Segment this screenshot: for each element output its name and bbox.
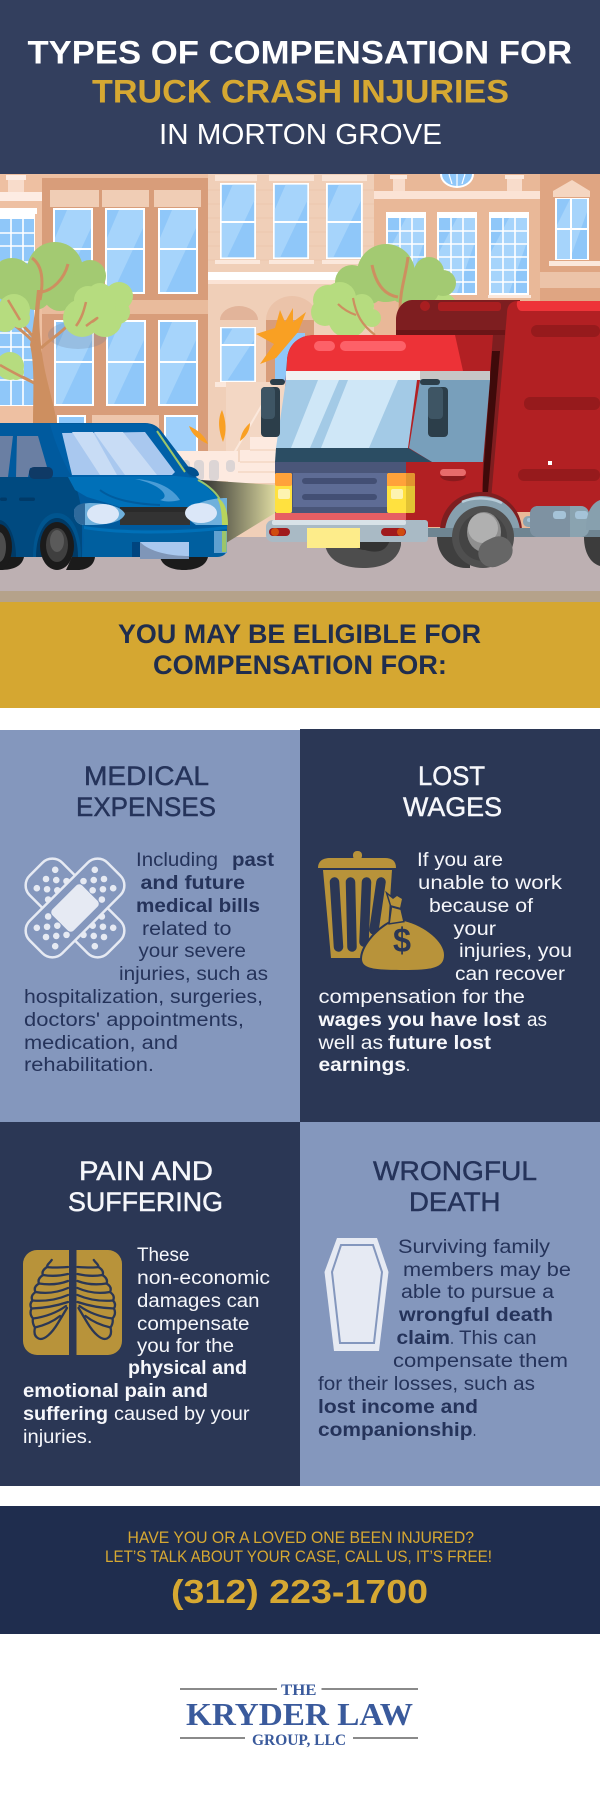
panel: header	[0, 0, 600, 174]
text: wrongful death body: members may be	[403, 1260, 571, 1281]
right tree	[311, 244, 458, 338]
text: wrongful death body	[318, 1237, 571, 1441]
text: lost wages body: your	[454, 919, 497, 940]
logo: the kryder law group: THE	[281, 1682, 316, 1699]
road	[0, 537, 600, 602]
headlight beam	[201, 480, 275, 543]
buildings	[0, 174, 600, 544]
icon: bandages	[20, 853, 130, 963]
front wheel	[325, 540, 401, 568]
heading: lost wages: WAGES	[403, 792, 502, 822]
text: wrongful death body: .	[472, 1420, 476, 1441]
icon: trash can and money bag	[318, 851, 444, 970]
logo: the kryder law group: KRYDER LAW	[186, 1696, 413, 1732]
text: wrongful death body: This can	[459, 1328, 536, 1349]
panel: pain and suffering	[0, 1122, 300, 1486]
text: medical expenses body	[24, 850, 275, 1076]
text: lost wages body: unable to work	[418, 873, 563, 894]
panel: call to action	[0, 1506, 600, 1634]
icon: impact starburst	[189, 308, 306, 444]
heading: medical expenses: EXPENSES	[76, 792, 216, 822]
text: pain and suffering body: suffering	[23, 1404, 108, 1425]
heading: pain and suffering	[68, 1156, 223, 1217]
text: lost wages body: wages you have lost	[317, 1010, 521, 1031]
text: medical expenses body: past	[232, 850, 275, 871]
illustration: street scene	[0, 174, 600, 602]
text: lost wages body: can recover	[455, 964, 566, 985]
left tree	[0, 242, 133, 423]
text: lost wages body: future lost	[388, 1033, 492, 1054]
icon: trash can and money bag: $	[393, 922, 411, 960]
text: pain and suffering body	[23, 1245, 270, 1448]
text: medical expenses body: injuries, such as	[119, 964, 268, 985]
text: wrongful death body: Surviving family	[398, 1237, 551, 1258]
text: lost wages body: injuries, you	[459, 941, 572, 962]
heading: medical expenses: MEDICAL	[84, 761, 209, 791]
car	[0, 423, 228, 570]
heading: lost wages: LOST	[418, 761, 485, 791]
text: wrongful death body: lost income and	[318, 1397, 478, 1418]
text: medical expenses body: related to	[142, 919, 232, 940]
heading: pain and suffering: PAIN AND	[79, 1156, 213, 1186]
phone number: (312) 223-1700	[171, 1573, 428, 1610]
text: medical expenses body: hospitalization, surgeries,	[24, 987, 263, 1008]
text: lost wages body: compensation for the	[318, 987, 525, 1008]
panel: medical expenses	[0, 730, 300, 1122]
text: medical expenses body: and future	[140, 873, 245, 894]
call to action text: LET’S TALK ABOUT YOUR CASE, CALL US, IT’S FREE!	[105, 1548, 492, 1566]
text: pain and suffering body: compensate	[137, 1314, 250, 1335]
banner heading: YOU MAY BE ELIGIBLE FOR	[118, 619, 481, 649]
text: medical expenses body: rehabilitation.	[24, 1055, 154, 1076]
text: lost wages body: earnings	[318, 1055, 406, 1076]
text: wrongful death body: wrongful death	[398, 1305, 553, 1326]
text: pain and suffering body: you for the	[137, 1336, 234, 1357]
truck	[261, 300, 600, 572]
text: lost wages body: If you are	[417, 850, 503, 871]
text: pain and suffering body: non-economic	[137, 1268, 270, 1289]
call to action text	[105, 1529, 492, 1566]
logo: the kryder law group	[180, 1682, 418, 1749]
text: medical expenses body: medication, and	[24, 1033, 178, 1054]
text: pain and suffering body: These	[137, 1245, 190, 1266]
text: medical expenses body: Including	[136, 850, 218, 871]
text: wrongful death body: claim	[396, 1328, 450, 1349]
text: lost wages body: well as	[317, 1033, 383, 1054]
text: wrongful death body: compensate them	[393, 1351, 568, 1372]
text: medical expenses body: medical bills	[136, 896, 260, 917]
title line 3: IN MORTON GROVE	[159, 119, 442, 151]
text: wrongful death body: able to pursue a	[401, 1282, 554, 1303]
rear wheel	[440, 492, 522, 530]
title line 1: TYPES OF COMPENSATION FOR	[28, 34, 572, 70]
heading: lost wages	[403, 761, 502, 822]
heading: wrongful death: WRONGFUL	[373, 1156, 537, 1186]
text: lost wages body: .	[406, 1055, 410, 1076]
heading: wrongful death: DEATH	[409, 1187, 500, 1217]
panel: eligibility banner	[0, 602, 600, 708]
text: wrongful death body: for their losses, such as	[318, 1374, 535, 1395]
text: wrongful death body: companionship	[318, 1420, 472, 1441]
text: wrongful death body: .	[450, 1328, 454, 1349]
text: lost wages body	[317, 850, 572, 1076]
icon: coffin	[324, 1238, 388, 1351]
text: lost wages body: as	[527, 1010, 547, 1031]
banner heading: COMPENSATION FOR:	[153, 650, 447, 680]
title line 2: TRUCK CRASH INJURIES	[92, 74, 509, 110]
heading: wrongful death	[373, 1156, 537, 1217]
panel: lost wages	[300, 729, 600, 1122]
text: pain and suffering body: caused by your	[114, 1404, 250, 1425]
panel: wrongful death	[300, 1122, 600, 1486]
text: pain and suffering body: damages can	[137, 1291, 260, 1312]
text: lost wages body: because of	[429, 896, 534, 917]
heading: pain and suffering: SUFFERING	[68, 1187, 223, 1217]
text: pain and suffering body: emotional pain and	[23, 1381, 208, 1402]
text: pain and suffering body: physical and	[128, 1358, 247, 1379]
text: medical expenses body: doctors' appointments,	[24, 1010, 244, 1031]
text: medical expenses body: your severe	[138, 941, 246, 962]
call to action text: HAVE YOU OR A LOVED ONE BEEN INJURED?	[128, 1529, 474, 1547]
heading: medical expenses	[76, 761, 216, 822]
icon: rib cage	[23, 1250, 122, 1355]
logo: the kryder law group: GROUP, LLC	[252, 1732, 346, 1749]
banner heading	[118, 619, 481, 680]
text: pain and suffering body: injuries.	[23, 1427, 92, 1448]
